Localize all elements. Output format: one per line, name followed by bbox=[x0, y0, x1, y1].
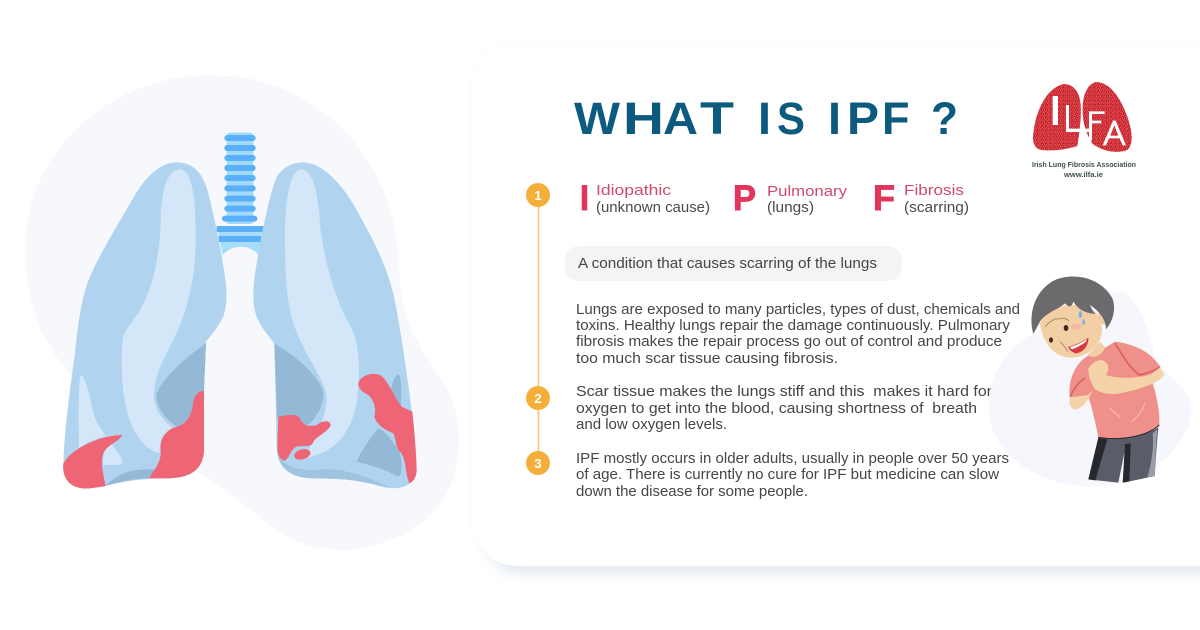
title: P bbox=[847, 93, 879, 144]
shirt bbox=[1069, 342, 1160, 439]
illustration: lungs bbox=[63, 133, 417, 489]
acronym: I Idiopathic: Idiopathic bbox=[596, 183, 671, 199]
logo: Irish Lung Fibrosis Association: Irish Lung Fibrosis Association bbox=[1032, 160, 1136, 169]
text block: repair process: Lungs are exposed to many particles, types of dust, chemicals and bbox=[576, 302, 1020, 318]
trousers bbox=[1088, 427, 1158, 483]
ear bbox=[1099, 306, 1110, 324]
acronym: F Fibrosis bbox=[873, 179, 969, 218]
face bbox=[1040, 305, 1102, 358]
acronym: F Fibrosis: Fibrosis bbox=[904, 183, 964, 199]
title: S bbox=[777, 93, 805, 144]
text block: repair process: toxins. Healthy lungs repair the damage continuously. Pulmonary bbox=[576, 318, 1011, 334]
logo: Irish Lung Fibrosis Association bbox=[1032, 82, 1136, 179]
text block: effects of scar tissue: Scar tissue makes the lungs stiff and this makes it hard for bbox=[576, 384, 992, 400]
right lung bbox=[253, 162, 417, 488]
definition pill: A condition that causes scarring of the lungs bbox=[578, 256, 877, 272]
text block: who is affected: of age. There is currently no cure for IPF but medicine can slow bbox=[576, 467, 1000, 483]
definition pill bbox=[565, 246, 902, 281]
illustration: man clutching chest bbox=[1031, 276, 1164, 483]
step marker 3: 3 bbox=[534, 456, 542, 471]
scar patches bbox=[63, 391, 204, 489]
step marker 1 bbox=[526, 183, 550, 207]
acronym: P Pulmonary: Pulmonary bbox=[767, 184, 848, 200]
acronym: I Idiopathic: (unknown cause) bbox=[596, 200, 710, 216]
blob behind man bbox=[989, 291, 1192, 487]
timeline connector bbox=[538, 195, 540, 463]
step marker 2: 2 bbox=[534, 391, 542, 406]
eyes, mouth and sweat bbox=[1045, 310, 1088, 353]
acronym: P Pulmonary: P bbox=[733, 179, 756, 218]
acronym: P Pulmonary: (lungs) bbox=[767, 200, 814, 216]
text block: repair process: fibrosis makes the repair process go out of control and produce bbox=[576, 334, 1002, 350]
panel: main white card bbox=[470, 42, 1200, 573]
acronym: F Fibrosis: (scarring) bbox=[904, 200, 969, 216]
title: T bbox=[700, 93, 734, 144]
scar patches bbox=[277, 374, 417, 483]
title: H bbox=[623, 93, 664, 144]
text block: effects of scar tissue: and low oxygen levels. bbox=[576, 417, 727, 433]
acronym: I Idiopathic: I bbox=[580, 179, 589, 218]
text block: effects of scar tissue bbox=[576, 384, 992, 433]
text block: effects of scar tissue: oxygen to get into the blood, causing shortness of breath bbox=[576, 401, 977, 417]
title: ? bbox=[931, 93, 958, 144]
step marker 3 bbox=[526, 451, 550, 475]
title: W bbox=[574, 93, 621, 144]
step marker 2 bbox=[526, 386, 550, 410]
hair bbox=[1031, 276, 1114, 334]
left lung bbox=[63, 162, 226, 489]
text block: who is affected bbox=[576, 451, 1009, 500]
title bbox=[574, 93, 958, 144]
title: F bbox=[882, 93, 910, 144]
title: I bbox=[828, 93, 841, 144]
logo: Irish Lung Fibrosis Association: www.ilfa.ie bbox=[1063, 170, 1103, 179]
title: I bbox=[758, 93, 771, 144]
background blob behind lungs bbox=[25, 75, 459, 550]
arms and hands bbox=[1069, 360, 1164, 409]
neck bbox=[1088, 342, 1105, 357]
text block: repair process: too much scar tissue causing fibrosis. bbox=[576, 351, 838, 367]
step marker 1: 1 bbox=[534, 188, 542, 203]
title: A bbox=[663, 93, 698, 144]
text block: who is affected: IPF mostly occurs in older adults, usually in people over 50 years bbox=[576, 451, 1009, 467]
acronym: P Pulmonary bbox=[733, 179, 848, 218]
acronym: I Idiopathic bbox=[580, 179, 710, 218]
text block: repair process bbox=[576, 302, 1020, 367]
trachea bbox=[217, 133, 263, 255]
acronym: F Fibrosis: F bbox=[873, 179, 895, 218]
text block: who is affected: down the disease for some people. bbox=[576, 484, 808, 500]
